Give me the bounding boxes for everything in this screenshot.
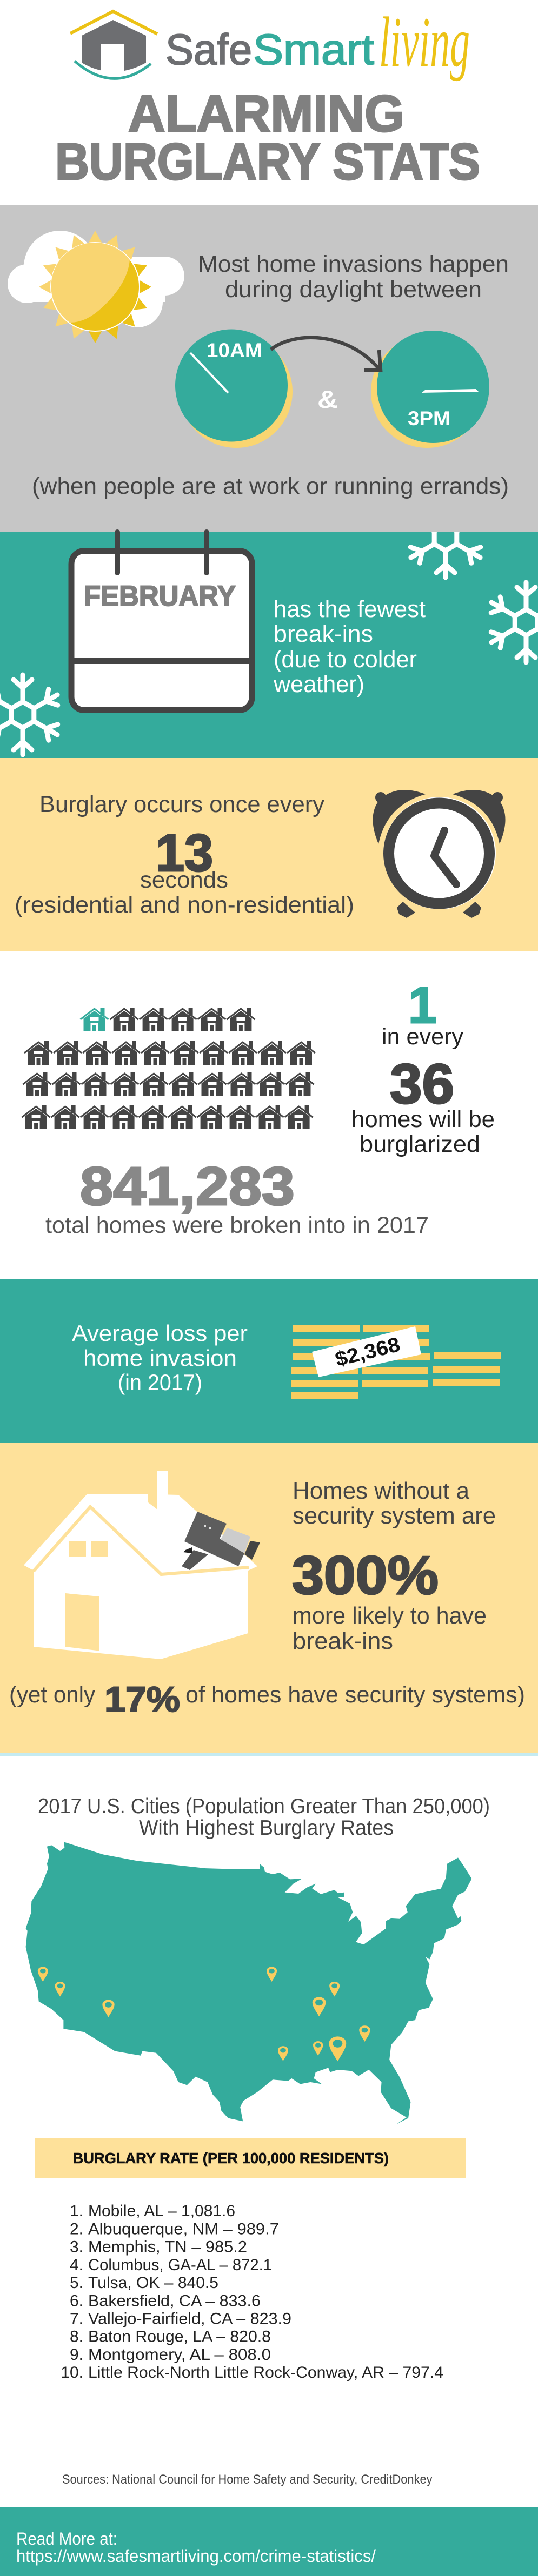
stat: 841,283: 841,283 bbox=[80, 1156, 295, 1217]
ranked list: cities: Mobile, AL – 1,081.6 bbox=[88, 2202, 235, 2220]
text: seconds: (residential and non-residential) bbox=[15, 892, 354, 918]
icon: cloud bbox=[8, 231, 184, 327]
text: fewest break-ins bbox=[273, 596, 426, 697]
logo word: Safe: Safe bbox=[165, 25, 252, 73]
map: United States bbox=[26, 1842, 471, 2124]
ranked list: cities: Montgomery, AL – 808.0 bbox=[88, 2346, 271, 2364]
icon: calendar: FEBRUARY bbox=[84, 580, 236, 612]
stat: 300%: 300% bbox=[292, 1545, 439, 1606]
text: without a security system: Homes without a bbox=[293, 1478, 470, 1504]
text: more likely: break-ins bbox=[293, 1628, 393, 1654]
ranked list: cities: 6. bbox=[70, 2292, 83, 2310]
logo bbox=[70, 2, 470, 82]
text: without a security system bbox=[293, 1478, 496, 1529]
text: fewest break-ins: break-ins bbox=[274, 621, 373, 647]
text: average loss bbox=[72, 1320, 248, 1395]
icon: money stacks: $2,368 bbox=[333, 1333, 402, 1371]
panel: header bbox=[0, 0, 538, 205]
ranked list: cities: 1. bbox=[70, 2202, 83, 2220]
text: only 17%: of homes have security systems) bbox=[185, 1682, 525, 1708]
text: more likely bbox=[293, 1602, 487, 1654]
legend bar: burglary rate: BURGLARY RATE (PER 100,000 RESIDENTS) bbox=[72, 2150, 389, 2166]
text: fewest break-ins: weather) bbox=[273, 671, 364, 697]
ranked list: cities: 7. bbox=[70, 2310, 83, 2327]
text: read more: https://www.safesmartliving.com/crime-statistics/ bbox=[16, 2546, 376, 2566]
divider band bbox=[0, 1753, 538, 1756]
text: once every: Burglary occurs once every bbox=[39, 791, 325, 817]
panel: security bbox=[0, 1443, 538, 1753]
text: seconds bbox=[15, 867, 354, 918]
icon: money stacks bbox=[291, 1325, 501, 1399]
text: in every: in every bbox=[382, 1024, 463, 1050]
text: average loss: Average loss per bbox=[72, 1320, 248, 1346]
text: intro: Most home invasions happen bbox=[198, 251, 509, 277]
text: intro bbox=[198, 251, 509, 303]
panel: daylight bbox=[0, 205, 538, 532]
ranked list: cities: Albuquerque, NM – 989.7 bbox=[88, 2221, 279, 2238]
panel: homes bbox=[0, 951, 538, 1279]
icon: calendar bbox=[71, 532, 252, 710]
text: seconds: seconds bbox=[140, 867, 228, 893]
text: fewest break-ins: has the fewest bbox=[274, 596, 426, 622]
icons: city pins bbox=[38, 1967, 370, 2061]
text: without a security system: security system are bbox=[293, 1502, 496, 1529]
text: only 17%: 17% bbox=[104, 1679, 180, 1719]
legend bar: burglary rate bbox=[35, 2138, 466, 2178]
clock: 10AM: 10AM bbox=[207, 339, 262, 361]
clock: 10AM bbox=[175, 330, 293, 448]
text: homes will be burglarized: burglarized bbox=[360, 1131, 480, 1157]
text: fewest break-ins: (due to colder bbox=[274, 646, 417, 673]
heading: cities bbox=[38, 1795, 490, 1840]
icon: snowflakes bbox=[0, 498, 538, 755]
stat: 1: 1 bbox=[408, 977, 437, 1034]
panel: average loss bbox=[0, 1279, 538, 1443]
panel: frequency bbox=[0, 758, 538, 951]
ranked list: cities: Baton Rouge, LA – 820.8 bbox=[88, 2328, 271, 2346]
logo word: living: living bbox=[379, 2, 470, 82]
ranked list: cities bbox=[61, 2202, 443, 2382]
text: homes will be burglarized bbox=[351, 1106, 495, 1157]
ranked list: cities: Columbus, GA-AL – 872.1 bbox=[88, 2256, 272, 2274]
text: more likely: more likely to have bbox=[293, 1602, 487, 1629]
text: note: (when people are at work or running errands) bbox=[32, 473, 509, 499]
heading: cities: With Highest Burglary Rates bbox=[139, 1816, 394, 1840]
stat: 13: 13 bbox=[156, 823, 213, 882]
icon: sun bbox=[39, 231, 151, 343]
text: sources: Sources: National Council for Home Safety and Security, CreditDonkey bbox=[62, 2472, 433, 2487]
logo word: Smart: Smart bbox=[253, 25, 374, 73]
ranked list: cities: Tulsa, OK – 840.5 bbox=[88, 2274, 218, 2292]
text: total homes: total homes were broken into in 2017 bbox=[45, 1212, 429, 1238]
clock: 3PM bbox=[371, 331, 489, 448]
title: BURGLARY STATS bbox=[55, 133, 480, 191]
stat: 36: 36 bbox=[390, 1053, 454, 1116]
ranked list: cities: 9. bbox=[70, 2346, 83, 2364]
ranked list: cities: 10. bbox=[61, 2364, 83, 2382]
text: average loss: (in 2017) bbox=[118, 1370, 202, 1395]
clock: 3PM: 3PM bbox=[408, 407, 450, 430]
ranked list: cities: 2. bbox=[70, 2221, 83, 2238]
text: homes will be burglarized: homes will be bbox=[351, 1106, 495, 1132]
text: only 17%: (yet only bbox=[9, 1682, 95, 1708]
ranked list: cities: Little Rock-North Little Rock-Conway, AR – 797.4 bbox=[88, 2364, 443, 2382]
panel: cities bbox=[0, 1756, 538, 2507]
ranked list: cities: 3. bbox=[70, 2238, 83, 2256]
icon: security camera bbox=[182, 1512, 260, 1570]
text: read more: Read More at: bbox=[16, 2529, 117, 2548]
text: read more bbox=[16, 2529, 376, 2566]
heading: cities: 2017 U.S. Cities (Population Greater Than 250,000) bbox=[38, 1795, 490, 1818]
text: average loss: home invasion bbox=[83, 1345, 237, 1371]
arrow: 10AM to 3PM bbox=[271, 338, 381, 370]
text: only 17% bbox=[9, 1679, 525, 1719]
text: intro: during daylight between bbox=[225, 277, 482, 303]
icon: white house bbox=[24, 1471, 257, 1659]
ranked list: cities: 5. bbox=[70, 2274, 83, 2292]
panel: footer bbox=[0, 2507, 538, 2576]
chart: house pictogram bbox=[22, 1008, 315, 1129]
ranked list: cities: 8. bbox=[70, 2328, 83, 2346]
ranked list: cities: Vallejo-Fairfield, CA – 823.9 bbox=[88, 2310, 291, 2327]
title: ALARMING bbox=[128, 85, 404, 143]
icon: logo house bbox=[70, 11, 157, 78]
ranked list: cities: Memphis, TN – 985.2 bbox=[88, 2238, 247, 2256]
ranked list: cities: Bakersfield, CA – 833.6 bbox=[88, 2292, 261, 2310]
icon: alarm clock bbox=[373, 790, 506, 918]
title bbox=[55, 85, 480, 191]
panel: february bbox=[0, 529, 538, 758]
ranked list: cities: 4. bbox=[70, 2256, 83, 2274]
text: ampersand: & bbox=[317, 385, 338, 413]
